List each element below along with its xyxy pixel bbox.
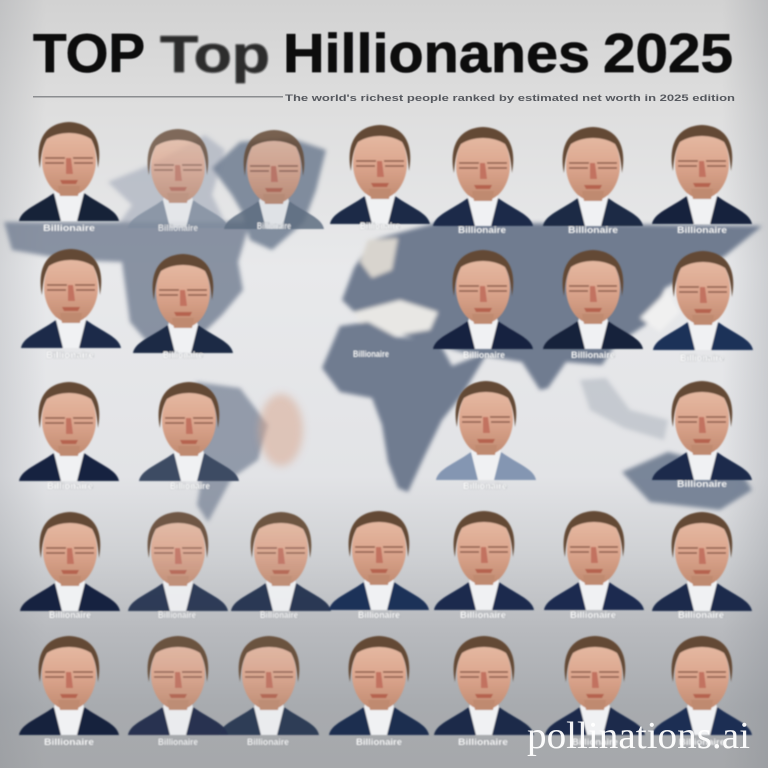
map: australia (622, 452, 752, 510)
map: south america (190, 382, 268, 522)
portrait 5: Billionaire (458, 225, 506, 235)
portrait 31: Billionaire (679, 737, 725, 747)
portrait 21: Billionaire (358, 610, 400, 620)
portrait row 4 (20, 511, 752, 620)
portrait 27: Billionaire (247, 737, 289, 747)
portrait 11: Billionaire (571, 350, 615, 360)
map: africa (322, 322, 488, 492)
portrait row 5 (19, 636, 752, 747)
portrait row 2 (21, 249, 753, 363)
portrait 1: Billionaire (43, 223, 95, 233)
portrait 30 (545, 636, 645, 747)
portrait 20 (231, 512, 331, 620)
portrait 2 (128, 129, 228, 233)
portrait 1 (19, 122, 119, 233)
portrait 12: Billionaire (680, 353, 724, 363)
portrait 14 (139, 382, 239, 491)
portrait 31 (652, 636, 752, 747)
portrait 17: Billionaire (677, 479, 727, 489)
portrait 15: faint face (259, 394, 303, 466)
portrait 18 (20, 512, 120, 620)
portrait 8: Billionaire (46, 350, 94, 360)
portrait 19 (128, 512, 228, 620)
portrait 4: Billionaire (360, 221, 400, 231)
portrait 20: Billionaire (260, 610, 298, 620)
portrait 26 (128, 636, 228, 747)
portrait 24 (652, 512, 752, 620)
map: alaska and arctic patches (108, 135, 225, 222)
portrait 4 (330, 125, 430, 231)
portrait 17 (652, 381, 752, 489)
portrait 5 (433, 127, 533, 235)
portrait 24: Billionaire (678, 610, 724, 620)
subtitle rule and text: The world's richest people ranked by estimated net worth in 2025 edition (285, 93, 735, 103)
portrait 7: Billionaire (677, 225, 727, 235)
map: greenland (212, 138, 326, 250)
title word: 2025: 2025 (603, 22, 733, 84)
portrait 29 (434, 636, 534, 747)
watermark: pollinations.ai (527, 715, 750, 757)
portrait 22 (434, 511, 534, 620)
portrait 12 (653, 251, 753, 363)
portrait 19: Billionaire (158, 610, 196, 620)
portrait 7 (652, 125, 752, 235)
world map (4, 135, 762, 522)
portrait 6: Billionaire (568, 225, 618, 235)
map: southeast asia islands (580, 378, 668, 440)
portrait 6 (543, 127, 643, 235)
portrait 10 (433, 250, 533, 360)
portrait 10: Billionaire (463, 350, 505, 360)
portrait 27 (219, 636, 319, 747)
portrait row 3 (19, 381, 752, 491)
portrait 13: Billionaire (47, 481, 93, 491)
portrait 2: Billionaire (158, 223, 198, 233)
map: eurasia (342, 222, 762, 390)
portrait 9 (133, 254, 233, 360)
portrait row 1 (19, 122, 752, 235)
map: north america (4, 222, 250, 352)
portrait 23: Billionaire (570, 610, 616, 620)
portrait 21 (329, 511, 429, 620)
map: east asia light islands (640, 290, 680, 332)
portrait 13 (19, 382, 119, 491)
portrait 3: Billionaire (257, 221, 291, 231)
portrait 28 (329, 636, 429, 747)
portrait 18: Billionaire (49, 610, 91, 620)
title word: blurred Top: Top (160, 26, 270, 84)
portrait 25: Billionaire (44, 737, 94, 747)
map label: Billionaire (353, 349, 389, 359)
portrait 25 (19, 636, 119, 747)
portrait 3 (224, 130, 324, 231)
portrait 29: Billionaire (458, 737, 508, 747)
portrait 9: Billionaire (163, 350, 203, 360)
map: europe light area (360, 238, 398, 278)
portrait 23 (544, 511, 644, 620)
title word: TOP: TOP (33, 22, 145, 84)
portrait 8 (21, 249, 121, 360)
portrait 16: Billionaire (463, 481, 507, 491)
portrait 26: Billionaire (158, 737, 198, 747)
portrait grid (19, 122, 753, 747)
portrait 30: Billionaire (572, 737, 618, 747)
title word: Hillionanes: Hillionanes (283, 22, 590, 84)
portrait 28: Billionaire (356, 737, 402, 747)
portrait 11 (543, 250, 643, 360)
portrait 14: Billionaire (170, 481, 210, 491)
portrait 22: Billionaire (460, 610, 506, 620)
portrait 16 (436, 381, 536, 491)
title (33, 22, 733, 84)
map: mediterranean light band (354, 300, 438, 336)
